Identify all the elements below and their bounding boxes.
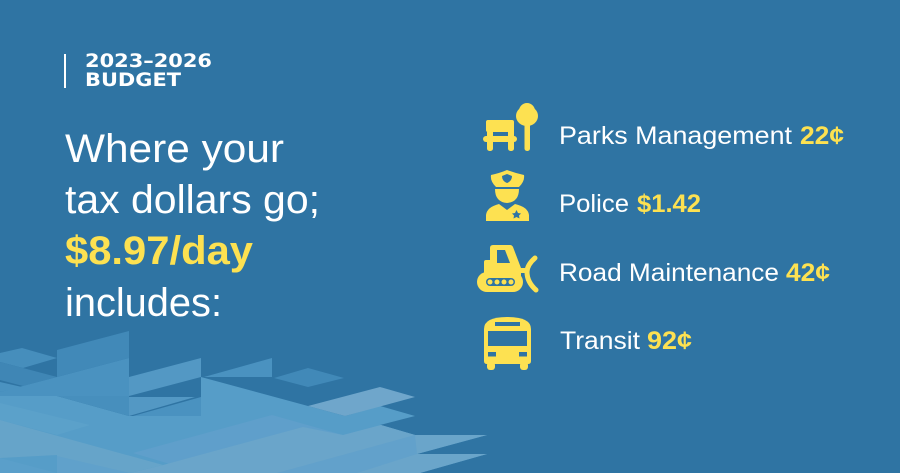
- main heading: Where your: [65, 127, 284, 171]
- budget word: BUDGET: [85, 70, 181, 91]
- list item: transit: Transit: [560, 327, 640, 355]
- list item: parks: 22¢: [800, 122, 844, 150]
- icon: police officer: [486, 170, 529, 221]
- budget label: [64, 51, 212, 91]
- list item: road maintenance: 42¢: [786, 259, 830, 287]
- list item: transit: 92¢: [647, 327, 692, 355]
- list item: parks: Parks Management: [559, 122, 792, 150]
- icon: bulldozer: [477, 245, 536, 292]
- main heading: $8.97/day: [65, 229, 254, 273]
- list item: road maintenance: Road Maintenance: [559, 259, 779, 287]
- main heading: includes:: [65, 281, 222, 325]
- decorative geometric skyline: [0, 331, 487, 473]
- list item: police: Police: [559, 190, 629, 218]
- list item: police: $1.42: [637, 190, 701, 218]
- main heading: tax dollars go;: [65, 178, 320, 222]
- icon: bench and tree: [483, 103, 538, 151]
- icon: bus: [484, 317, 531, 370]
- main heading: [65, 127, 320, 325]
- budget years: 2023–2026: [85, 51, 212, 72]
- divider bar: [64, 54, 66, 88]
